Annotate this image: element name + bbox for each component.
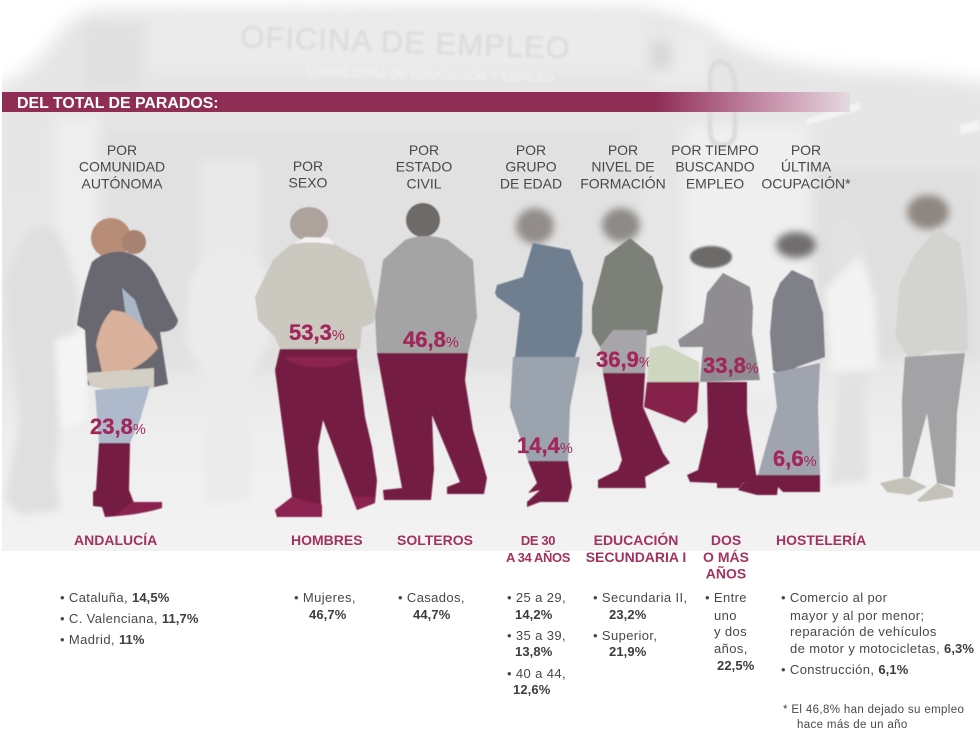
heading: de 30 a 34 años: A 34 AÑOS (506, 550, 571, 565)
value 23,8%: 23,8% (90, 414, 146, 439)
list: ocupación: reparación de vehículos (790, 624, 937, 639)
heading: Hostelería: HOSTELERÍA (776, 532, 866, 548)
category: por comunidad autónoma: POR (107, 142, 137, 158)
list: grupos de edad: 12,6% (513, 682, 551, 697)
category: por grupo de edad: POR (516, 142, 546, 158)
category: por última ocupación: POR (791, 142, 821, 158)
list: comunidades: • C. Valenciana, (60, 611, 162, 626)
value 6,6%: 6,6% (773, 446, 817, 471)
sign subtitle: CONSEJERÍA DE EDUCACIÓN Y EMPLEO (306, 64, 555, 86)
sign text: OFICINA DE EMPLEO: OFICINA DE EMPLEO (240, 19, 571, 66)
list: grupos de edad: • 35 a 39, (507, 628, 566, 643)
value 33,8%: 33,8% (703, 353, 759, 378)
category: por nivel de formación: NIVEL DE (591, 159, 655, 175)
heading: dos o más años: AÑOS (706, 564, 746, 582)
category: por última ocupación: OCUPACIÓN* (761, 175, 851, 191)
list: mujeres: 46,7% (309, 607, 347, 622)
heading: de 30 a 34 años: DE 30 (521, 533, 555, 548)
person 7: Hostelería, 6,6% (738, 232, 825, 495)
list: casados: 44,7% (413, 607, 451, 622)
footnote: * El 46,8% han dejado su empleo (783, 704, 964, 716)
category: por estado civil: POR (409, 142, 439, 158)
category: por sexo: SEXO (289, 175, 328, 191)
title text: DEL TOTAL DE PARADOS: (17, 95, 219, 112)
list: tiempo: 22,5% (717, 658, 755, 673)
heading: Hombres: HOMBRES (291, 532, 363, 548)
category: por última ocupación: ÚLTIMA (781, 159, 832, 175)
list: comunidades: 11% (119, 632, 145, 647)
heading: dos o más años: O MÁS (703, 549, 749, 565)
list: comunidades: • Madrid, (60, 632, 119, 647)
list: formación: • Secundaria II, (593, 590, 687, 605)
list: ocupación: 6,1% (878, 662, 909, 677)
person 2: Hombres, 53,3% (255, 207, 377, 517)
list: comunidades: 14,5% (132, 590, 170, 605)
value 53,3%: 53,3% (289, 320, 345, 345)
list: ocupación: mayor y al por menor; (790, 608, 924, 623)
footnote: hace más de un año (797, 719, 908, 731)
heading: educación secundaria I: EDUCACIÓN (594, 531, 678, 548)
list: tiempo: años, (714, 641, 748, 656)
list: ocupación: • Comercio al por (781, 590, 888, 605)
person 8: end of queue (880, 195, 968, 502)
category: por comunidad autónoma: AUTÓNOMA (82, 175, 163, 191)
category: por tiempo buscando empleo: EMPLEO (686, 175, 744, 191)
title band (2, 92, 850, 112)
category: por sexo: POR (293, 158, 323, 174)
list: casados: • Casados, (398, 590, 465, 605)
list: tiempo: uno (714, 608, 737, 623)
heading: dos o más años: DOS (711, 532, 741, 548)
category: por nivel de formación: FORMACIÓN (580, 175, 666, 191)
heading: educación secundaria I: SECUNDARIA I (586, 549, 686, 565)
category: por estado civil: CIVIL (406, 175, 442, 191)
person 6: Dos o más años, 33,8% (678, 246, 760, 488)
background people (5, 217, 880, 515)
list: grupos de edad: • 25 a 29, (507, 590, 566, 605)
category: por grupo de edad: DE EDAD (500, 175, 562, 191)
category: por grupo de edad: GRUPO (505, 159, 557, 175)
heading: Solteros: SOLTEROS (397, 532, 473, 548)
list: comunidades: • Cataluña, (60, 590, 132, 605)
category: por nivel de formación: POR (608, 142, 638, 158)
list: ocupación: de motor y motocicletas, (790, 641, 944, 656)
list: grupos de edad: • 40 a 44, (507, 666, 566, 681)
list: tiempo: • Entre (705, 590, 747, 605)
list: grupos de edad: 13,8% (515, 644, 553, 659)
list: ocupación: • Construcción, (781, 662, 878, 677)
list: grupos de edad: 14,2% (515, 607, 553, 622)
person 4: De 30 a 34 años, 14,4% (495, 208, 583, 507)
category: por tiempo buscando empleo: POR TIEMPO (671, 142, 759, 158)
shopping bag (644, 345, 699, 423)
value 36,9%: 36,9% (596, 347, 652, 372)
list: ocupación: 6,3% (944, 641, 974, 656)
list: formación: • Superior, (593, 628, 657, 643)
category: por tiempo buscando empleo: BUSCANDO (675, 159, 755, 175)
heading: Andalucía: ANDALUCÍA (74, 532, 157, 548)
person 1: Andalucía, 23,8% (77, 218, 178, 517)
value 14,4%: 14,4% (517, 433, 573, 458)
value 46,8%: 46,8% (403, 327, 459, 352)
category: por comunidad autónoma: COMUNIDAD (79, 159, 165, 175)
background photo: employment office front (0, 8, 980, 600)
list: comunidades: 11,7% (162, 611, 199, 626)
person 5: Educación secundaria I, 36,9% (592, 208, 670, 488)
list: formación: 23,2% (609, 607, 647, 622)
list: tiempo: y dos (714, 624, 747, 639)
list: mujeres: • Mujeres, (294, 590, 356, 605)
person 3: Solteros, 46,8% (375, 203, 487, 500)
category: por estado civil: ESTADO (396, 159, 452, 175)
list: formación: 21,9% (609, 644, 647, 659)
